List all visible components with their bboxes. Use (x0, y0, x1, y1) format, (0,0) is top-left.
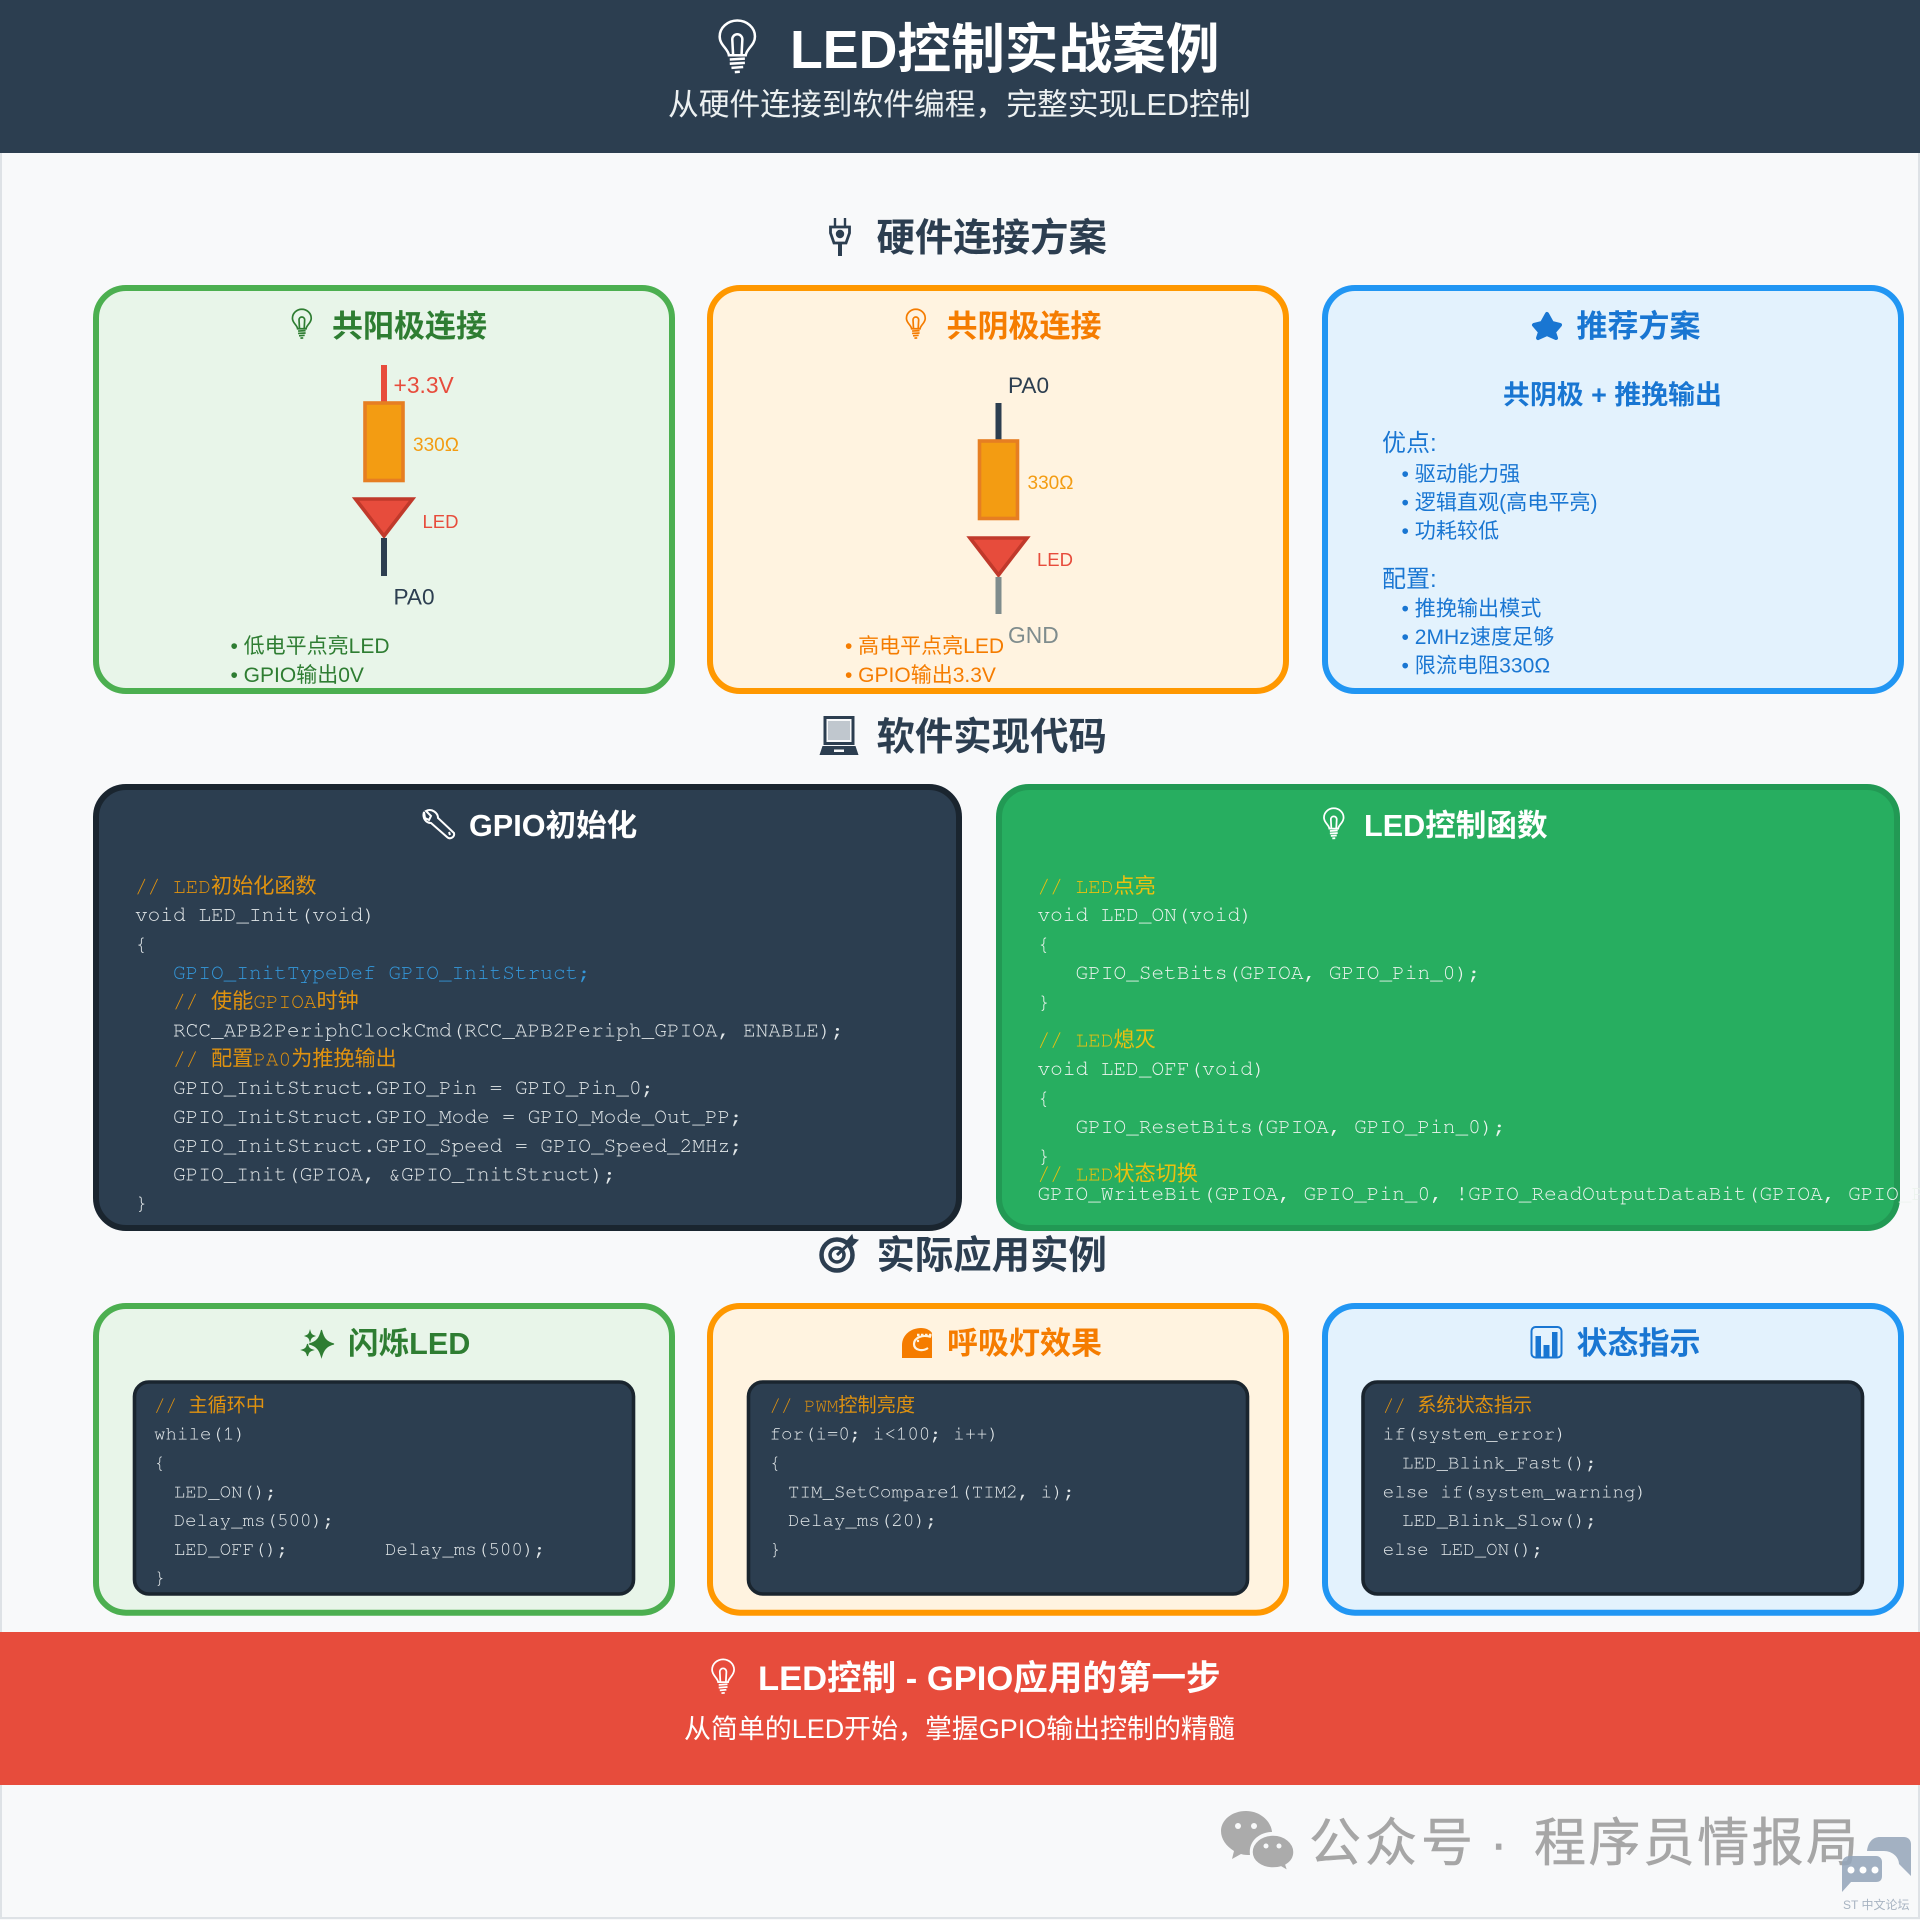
icon: bulb green (292, 309, 311, 338)
code block: Delay_ms(500); (385, 1540, 546, 1559)
footer title: LED控制 - GPIO应用的第一步 (758, 1660, 1221, 1698)
code block: } (1038, 992, 1050, 1013)
code block: void LED_ON(void) (1038, 905, 1253, 926)
code block: } (135, 1193, 148, 1214)
code block: // 配置PA0为推挽输出 (173, 1046, 397, 1070)
code block: } (770, 1540, 781, 1559)
watermark text: 公众号 (1309, 1815, 1477, 1873)
circuit diagram: cathode: PA0 (1008, 373, 1049, 398)
circuit diagram: anode (356, 365, 459, 610)
code block: GPIO_ResetBits(GPIOA, GPIO_Pin_0); (1076, 1117, 1506, 1138)
section heading: application examples: 实际应用实例 (876, 1234, 1107, 1278)
code block: TIM_SetCompare1(TIM2, i); (788, 1482, 1075, 1502)
code block (1038, 874, 1920, 1205)
code block: { (135, 934, 148, 955)
icon: sparkles (302, 1330, 334, 1357)
panel title: 状态指示 (1576, 1326, 1700, 1361)
code block: void LED_Init(void) (135, 905, 376, 926)
icon: bulb orange (906, 309, 925, 338)
icon: plug (830, 218, 850, 256)
code block: if(system_error) (1383, 1424, 1567, 1444)
code block: { (770, 1454, 781, 1472)
watermark text (1309, 1815, 1860, 1873)
recommendation heading: 共阴极 + 推挽输出 (1503, 380, 1722, 410)
code block: LED_OFF(); (174, 1540, 289, 1559)
icon: wrench (423, 810, 454, 838)
configuration list: 配置: (1382, 566, 1437, 593)
logo label: ST 中文论坛 (1843, 1897, 1909, 1912)
code block: GPIO_InitTypeDef GPIO_InitStruct; (173, 963, 591, 984)
notes: • 低电平点亮LED (230, 635, 390, 658)
code block (1363, 1382, 1862, 1594)
code block: LED_ON(); (174, 1482, 277, 1502)
icon: laptop (820, 718, 858, 755)
configuration list: • 限流电阻330Ω (1402, 654, 1550, 678)
code block: } (154, 1568, 166, 1588)
code block: // PWM控制亮度 (770, 1394, 915, 1416)
watermark text: · (1490, 1815, 1507, 1873)
advantages list: • 逻辑直观(高电平亮) (1402, 490, 1598, 514)
icon: target (822, 1235, 858, 1270)
code block: while(1) (154, 1424, 246, 1444)
circuit diagram: anode: PA0 (394, 584, 435, 610)
header banner (0, 0, 1920, 153)
code block: RCC_APB2PeriphClockCmd(RCC_APB2Periph_GPIOA, ENABLE); (173, 1020, 844, 1042)
watermark: ST forum logo (1842, 1837, 1911, 1912)
circuit diagram: anode: 330Ω (413, 435, 459, 456)
notes: • 高电平点亮LED (845, 635, 1004, 658)
code block: for(i=0; i<100; i++) (770, 1424, 999, 1444)
section heading: software code: 软件实现代码 (876, 716, 1107, 759)
code block: // LED初始化函数 (135, 874, 317, 898)
code block: GPIO_SetBits(GPIOA, GPIO_Pin_0); (1076, 963, 1481, 984)
code block: // LED点亮 (1038, 874, 1156, 898)
subtitle: 从硬件连接到软件编程，完整实现LED控制 (668, 87, 1251, 122)
panel: breathing light (710, 1306, 1286, 1613)
footer banner (0, 1632, 1920, 1785)
code block: // 主循环中 (154, 1394, 265, 1416)
panel title: GPIO初始化 (469, 809, 637, 843)
panel: common anode connection (96, 288, 672, 691)
notes (230, 635, 390, 687)
code block: GPIO_InitStruct.GPIO_Pin = GPIO_Pin_0; (173, 1078, 654, 1099)
icon: bar chart (1532, 1327, 1562, 1358)
panel: common cathode connection (710, 288, 1286, 691)
code block: } (1038, 1146, 1050, 1167)
panel title: 共阴极连接 (946, 309, 1102, 344)
notes: • GPIO输出3.3V (845, 664, 996, 687)
panel title: 推荐方案 (1576, 309, 1700, 344)
section heading: hardware connection: 硬件连接方案 (876, 217, 1107, 260)
circuit diagram: cathode: GND (1008, 622, 1059, 648)
title: LED控制实战案例 (790, 20, 1220, 80)
code block: { (154, 1454, 166, 1472)
code block: { (1038, 1088, 1050, 1109)
icon: star (1534, 314, 1560, 338)
circuit diagram: anode: LED (422, 511, 458, 532)
configuration list: • 2MHz速度足够 (1402, 625, 1554, 649)
code block: GPIO_Init(GPIOA, &GPIO_InitStruct); (173, 1164, 616, 1186)
panel title: LED控制函数 (1364, 809, 1548, 843)
panel title: 闪烁LED (348, 1327, 470, 1361)
code block: // LED熄灭 (1038, 1028, 1156, 1052)
code block: GPIO_InitStruct.GPIO_Speed = GPIO_Speed_2MHz; (173, 1136, 743, 1157)
advantages list (1382, 430, 1598, 543)
advantages list: • 驱动能力强 (1402, 462, 1520, 486)
advantages list: 优点: (1382, 430, 1437, 457)
icon: wave (902, 1328, 932, 1358)
code block: { (1038, 934, 1050, 955)
circuit diagram: cathode (970, 373, 1073, 648)
code block: // 系统状态指示 (1383, 1394, 1532, 1416)
code block: Delay_ms(500); (174, 1511, 334, 1530)
panel: status indication (1325, 1306, 1901, 1613)
code block (135, 874, 844, 1214)
panel title: 呼吸灯效果 (947, 1326, 1102, 1361)
circuit diagram: cathode: LED (1037, 549, 1073, 570)
watermark text: 程序员情报局 (1534, 1815, 1860, 1873)
code block (748, 1382, 1248, 1594)
icon: light bulb (720, 21, 755, 72)
panel: blinking LED (96, 1306, 672, 1613)
code block: GPIO_InitStruct.GPIO_Mode = GPIO_Mode_Out_PP; (173, 1107, 743, 1128)
code block: // LED状态切换 (1038, 1162, 1198, 1186)
panel: recommended solution (1325, 288, 1901, 691)
code block: LED_Blink_Slow(); (1402, 1511, 1597, 1530)
configuration list (1382, 566, 1554, 678)
circuit diagram: cathode: 330Ω (1028, 473, 1073, 494)
icon: wechat (1221, 1811, 1294, 1871)
panel: GPIO init code (96, 787, 959, 1228)
icon: bulb white (1324, 808, 1344, 838)
code block (134, 1382, 634, 1594)
code block: else LED_ON(); (1383, 1540, 1544, 1559)
panel: LED control functions code (999, 787, 1920, 1228)
code block: // 使能GPIOA时钟 (173, 989, 359, 1013)
footer subtitle: 从简单的LED开始，掌握GPIO输出控制的精髓 (684, 1714, 1235, 1744)
code block: void LED_OFF(void) (1038, 1059, 1265, 1080)
notes (845, 635, 1004, 687)
panel title: 共阳极连接 (332, 309, 487, 344)
icon: bulb white (712, 1659, 734, 1693)
circuit diagram: anode: +3.3V (394, 372, 455, 398)
icon: chat bubbles (1842, 1837, 1911, 1892)
code block: LED_Blink_Fast(); (1402, 1454, 1597, 1472)
code block: else if(system_warning) (1383, 1482, 1647, 1502)
notes: • GPIO输出0V (230, 664, 364, 687)
configuration list: • 推挽输出模式 (1402, 596, 1541, 620)
code block: Delay_ms(20); (788, 1511, 937, 1530)
watermark: official account (1221, 1811, 1860, 1873)
advantages list: • 功耗较低 (1402, 519, 1499, 543)
